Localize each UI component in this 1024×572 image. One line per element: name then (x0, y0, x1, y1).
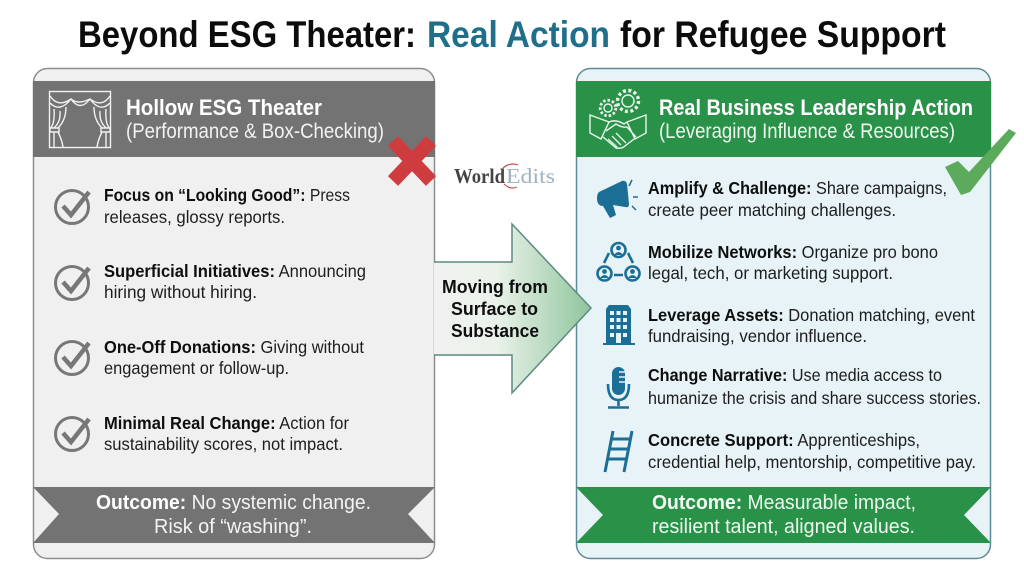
item: mobilize networks: legal, tech, or marketing support. (648, 263, 893, 283)
item: superficial initiatives (56, 261, 366, 302)
item: minimal real change (56, 413, 349, 454)
item: amplify and challenge (597, 178, 947, 220)
header: hollow ESG theater (33, 81, 435, 157)
item: one-off donations: engagement or follow-up. (104, 358, 289, 378)
item: one-off donations (56, 337, 364, 378)
title: Real Action (427, 14, 610, 55)
panel: real business leadership action (576, 68, 991, 558)
outcome banner: right (576, 487, 991, 543)
item: change narrative: humanize the crisis and share success stories. (648, 388, 981, 408)
icon: green check (945, 129, 1016, 195)
header subtitle: (Leveraging Influence & Resources) (659, 120, 955, 143)
icon: network of people (598, 243, 640, 280)
icon: microphone (608, 367, 629, 408)
panel: hollow ESG theater (33, 68, 435, 558)
logo: WorldEdits (454, 164, 555, 188)
item: concrete support: Concrete Support: Apprenticeships, (648, 430, 920, 450)
arrow: surface to substance: Surface to (451, 298, 538, 319)
arrow: surface to substance (434, 224, 591, 393)
item: looking good (56, 185, 350, 227)
outcome banner: left: Outcome: No systemic change. (96, 492, 371, 514)
header title: Hollow ESG Theater (126, 95, 322, 120)
icon: red cross (393, 141, 431, 181)
logo: WorldEdits: World (454, 164, 505, 188)
icon: check circle (56, 190, 89, 224)
item: minimal real change: Minimal Real Change: Action for (104, 413, 349, 433)
item: minimal real change: sustainability scores, not impact. (104, 434, 343, 454)
header: real business leadership (576, 81, 991, 157)
outcome banner: left (33, 487, 435, 543)
title: Beyond ESG Theater: (78, 14, 416, 55)
title: for Refugee Support (620, 14, 946, 55)
item: change narrative (608, 365, 981, 408)
icon: stage curtain (50, 92, 110, 148)
icon: gears and handshake (590, 90, 646, 148)
item: leverage assets (603, 305, 975, 346)
header title: Real Business Leadership Action (659, 95, 973, 120)
item: leverage assets: fundraising, vendor influence. (648, 326, 867, 346)
logo: WorldEdits: Edits (506, 164, 555, 188)
outcome banner: left: Risk of “washing”. (154, 516, 312, 538)
item: superficial initiatives: Superficial Initiatives: Announcing (104, 261, 366, 281)
item: looking good: releases, glossy reports. (104, 207, 285, 227)
icon: check circle (56, 342, 89, 374)
icon: office building (603, 305, 635, 345)
outcome banner: right: Outcome: Measurable impact, (652, 492, 916, 514)
item: concrete support (605, 430, 976, 472)
item: amplify and challenge: create peer matching challenges. (648, 200, 896, 220)
item: change narrative: Change Narrative: Use media access to (648, 365, 942, 385)
outcome banner: right: resilient talent, aligned values. (652, 516, 915, 538)
item: amplify and challenge: Amplify & Challenge: Share campaigns, (648, 178, 947, 198)
item: one-off donations: One-Off Donations: Giving without (104, 337, 364, 357)
arrow: surface to substance: Moving from (442, 276, 548, 297)
title (78, 14, 946, 55)
item: mobilize networks: Mobilize Networks: Organize pro bono (648, 242, 938, 262)
arrow: surface to substance: Substance (451, 320, 539, 341)
item: concrete support: credential help, mentorship, competitive pay. (648, 452, 976, 472)
icon: check circle (56, 266, 89, 300)
header subtitle: (Performance & Box-Checking) (126, 120, 384, 143)
icon: check circle (56, 418, 89, 450)
icon: ladder (605, 431, 632, 472)
item: looking good: Focus on “Looking Good”: Press (104, 185, 350, 205)
item: leverage assets: Leverage Assets: Donation matching, event (648, 305, 975, 325)
item: superficial initiatives: hiring without hiring. (104, 282, 257, 302)
icon: megaphone (597, 180, 638, 218)
item: mobilize networks (598, 242, 938, 283)
